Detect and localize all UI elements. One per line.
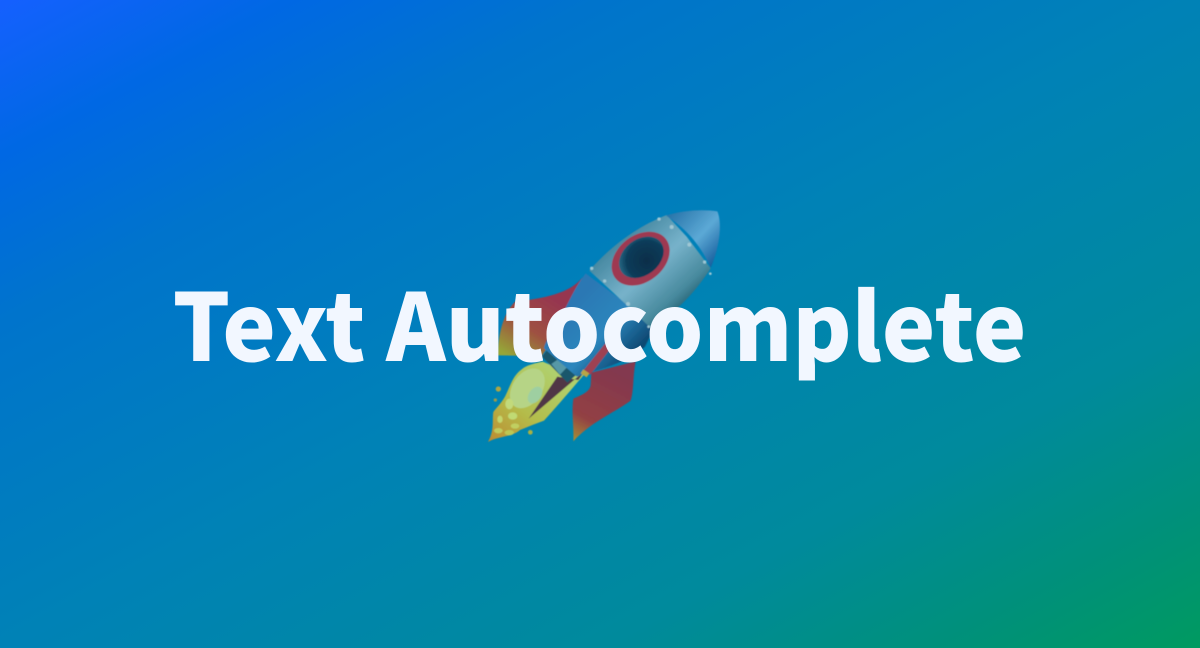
rocket nozzle <box>529 347 585 419</box>
rocket flame <box>488 362 585 442</box>
rocket window <box>601 221 680 297</box>
rocket upper hull <box>589 215 711 327</box>
rocket nose cone <box>666 210 720 268</box>
rocket right fin <box>573 361 636 441</box>
rocket rivets <box>590 217 712 328</box>
icon: rocket <box>488 210 720 442</box>
rocket left fin <box>498 278 582 356</box>
title: Text Autocomplete <box>172 253 1026 388</box>
rocket lower hull <box>544 273 653 377</box>
